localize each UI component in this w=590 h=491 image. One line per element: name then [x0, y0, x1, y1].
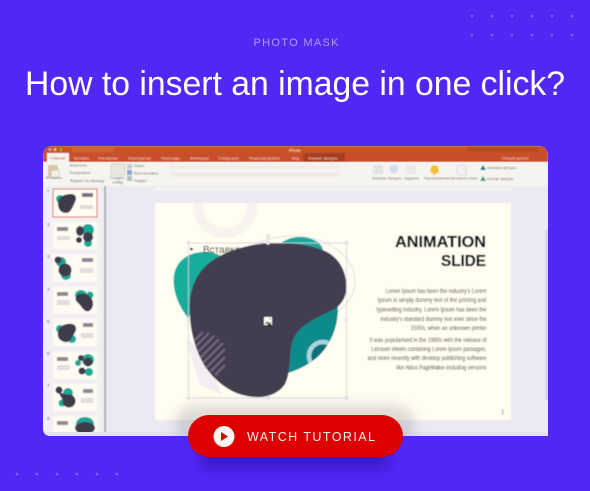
decorative dots bottom left — [16, 473, 118, 475]
title bar and tabs: Рисование — [98, 156, 119, 160]
thumbnail 2 — [53, 222, 97, 249]
horizontal ruler — [155, 186, 511, 191]
thumbnail numbers: 4 — [47, 287, 50, 292]
thumbnail numbers: 8 — [47, 416, 50, 421]
picture placeholder icon — [264, 317, 272, 328]
button shadow — [175, 405, 415, 469]
ribbon toolbar: Формат по образцу — [70, 179, 104, 183]
selection box with handles — [187, 234, 348, 400]
slide body text: Lorem Ipsum has been the industry's Lorem — [386, 288, 486, 295]
dark photo mask blob — [190, 243, 347, 397]
teal left shape — [174, 252, 224, 318]
title bar and tabs — [43, 146, 548, 162]
ribbon toolbar: Вырезать — [70, 164, 87, 168]
eyebrow label: PHOTO MASK — [254, 37, 339, 49]
slide body text: 1500s, when an unknown printer — [410, 325, 486, 332]
slide number: 1 — [501, 410, 505, 416]
slide heading: ANIMATION — [395, 234, 486, 251]
thumbnail numbers: 2 — [47, 222, 50, 227]
hatch inside blob — [190, 332, 225, 375]
slide — [155, 179, 511, 420]
ribbon toolbar: Вставить — [46, 176, 62, 180]
thumbnail 7 — [53, 384, 97, 411]
title bar and tabs: Главная — [50, 156, 65, 160]
ribbon toolbar: Заливка фигуры — [487, 166, 516, 170]
decorative dots top right — [471, 15, 573, 36]
thumbnail numbers: 3 — [47, 254, 50, 259]
application window — [43, 146, 548, 436]
ribbon toolbar: Восстановить — [134, 172, 158, 176]
thumbnail numbers: 5 — [47, 319, 50, 324]
button: watch tutorial — [188, 415, 403, 457]
slide body text: Ipsum is simply dummy text of the printing and — [378, 297, 487, 304]
title: How to insert an image in one click? — [25, 65, 565, 103]
title bar and tabs: Вставка — [74, 156, 90, 160]
title bar and tabs: Анимация — [190, 156, 209, 160]
thumbnail numbers — [47, 188, 50, 421]
icon: play — [214, 426, 234, 447]
slide heading: SLIDE — [441, 253, 486, 270]
slide heading — [395, 234, 486, 270]
thumbnail panel — [43, 186, 106, 436]
ribbon toolbar — [43, 162, 548, 186]
ribbon toolbar: слайд — [112, 180, 123, 184]
faint hatch outside shape — [186, 340, 222, 395]
title bar and tabs: Формат фигуры — [308, 156, 337, 160]
ribbon toolbar: Надпись — [404, 176, 419, 180]
title bar and tabs: Вид — [292, 156, 300, 160]
right scrollbar — [545, 230, 548, 400]
rotation guide arc — [229, 236, 355, 326]
title bar and tabs: Переходы — [161, 156, 180, 160]
teal right shape — [288, 306, 339, 374]
thumbnail 1 — [53, 189, 97, 217]
teal top shape — [277, 237, 323, 265]
status bar — [43, 432, 548, 436]
ribbon toolbar: Рисунки — [372, 176, 386, 180]
title bar and tabs: Рецензирование — [249, 156, 281, 160]
title bar and tabs: Слайд-шоу — [218, 156, 239, 160]
thumbnail 8 — [54, 416, 96, 432]
ribbon toolbar: Раздел — [134, 179, 147, 183]
title bar and tabs: Общий доступ — [502, 156, 529, 160]
slide body text: like Aldus PageMaker including versions — [396, 364, 486, 372]
thumbnail numbers: 6 — [47, 351, 50, 356]
button label: WATCH TUTORIAL — [247, 430, 375, 444]
ribbon toolbar: Контур фигуры — [487, 177, 514, 181]
ribbon toolbar: Фигуры — [388, 176, 401, 180]
thumbnail 4 — [53, 287, 97, 314]
slide body text — [368, 288, 487, 372]
placeholder text: Вставка рисунка — [203, 245, 280, 256]
ribbon toolbar: Расположение — [424, 176, 450, 180]
ribbon toolbar: Копировать — [70, 171, 90, 175]
slide body text: typesetting industry. Lorem Ipsum has been the — [376, 306, 487, 314]
title bar and tabs: Photo — [289, 148, 301, 153]
slide body text: industry's standard dummy text ever since the — [380, 316, 487, 323]
thumbnail 3 — [53, 254, 97, 282]
ribbon toolbar: Создать — [110, 176, 124, 180]
slide body text: Letraset sheets containing Lorem Ipsum passages, — [372, 346, 487, 353]
thumbnail 5 — [53, 319, 97, 346]
title bar and tabs: Конструктор — [128, 156, 152, 160]
ribbon toolbar: Экспресс-стили — [450, 176, 478, 180]
thumbnail numbers: 7 — [47, 383, 50, 388]
thumbnail numbers: 1 — [47, 188, 50, 193]
ribbon toolbar: Макет — [134, 164, 145, 168]
slide body text: and more recently with desktop publishing software — [368, 355, 487, 362]
faint ring — [194, 204, 256, 238]
slide body text: It was popularised in the 1960s with the release of — [370, 337, 487, 344]
thumbnail 6 — [53, 352, 97, 379]
